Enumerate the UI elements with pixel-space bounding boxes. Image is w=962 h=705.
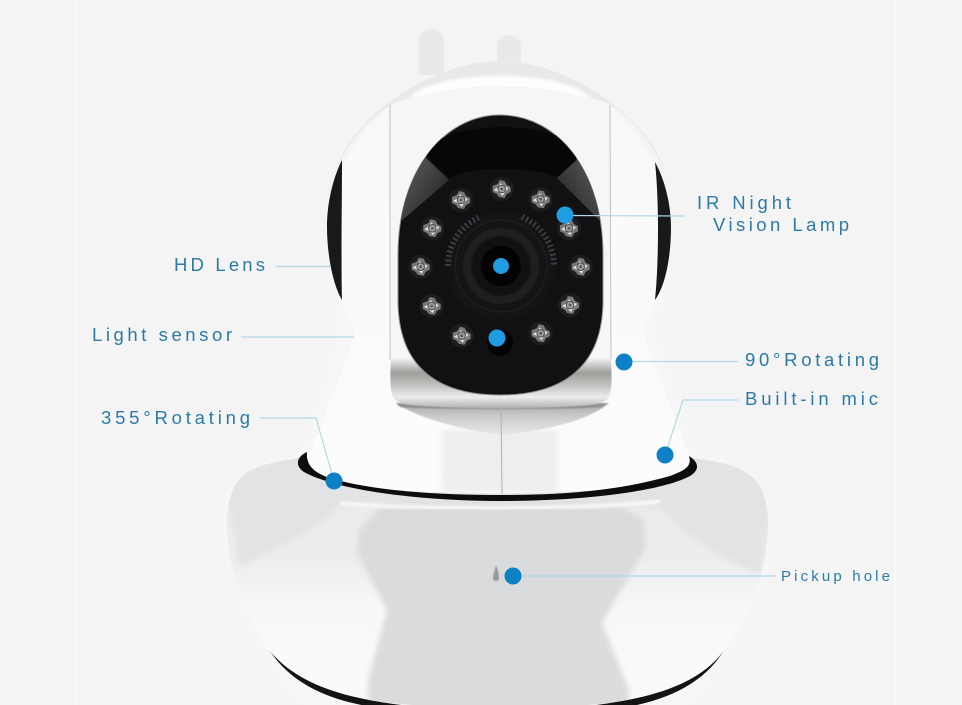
light sensor window [487, 330, 513, 356]
soft white halo [222, 58, 773, 705]
neck seam [501, 408, 502, 494]
camera base [225, 450, 775, 705]
antennas [419, 29, 521, 75]
side black lens crescents [327, 160, 671, 300]
label: 90 degree rotating: 90°Rotating [745, 349, 879, 370]
base ring [298, 452, 697, 501]
label: IR Night Vision Lamp [697, 192, 849, 235]
IR LED ring [409, 177, 593, 348]
illustration: security camera [222, 29, 775, 705]
camera face [396, 115, 606, 395]
callout dots [326, 206, 674, 584]
label: Built-in mic: Built-in mic [745, 388, 878, 409]
callout lines [241, 216, 776, 576]
label: Light sensor: Light sensor [92, 324, 232, 345]
pickup hole [493, 565, 499, 581]
label: 355 degree rotating: 355°Rotating [101, 407, 250, 428]
bottom black rim [266, 644, 725, 705]
head and neck body [307, 61, 692, 493]
label: HD Lens: HD Lens [174, 254, 265, 275]
front panel [390, 86, 612, 409]
label: Pickup hole: Pickup hole [781, 568, 890, 585]
neck shadow under head [396, 403, 609, 435]
label: IR Night Vision Lamp: Vision Lamp [713, 214, 849, 235]
label: IR Night Vision Lamp: IR Night [697, 192, 791, 213]
HD lens [447, 212, 555, 320]
